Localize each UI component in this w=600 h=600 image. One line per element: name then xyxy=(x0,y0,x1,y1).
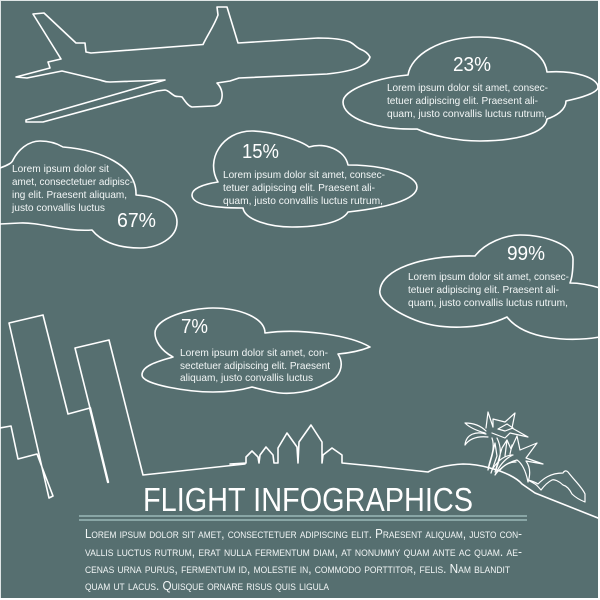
cloud: 15% xyxy=(192,131,417,227)
text block: footer paragraph: Lorem ipsum dolor sit amet, consectetuer adipiscing elit. Praesent aliquam, justo con- xyxy=(85,527,522,541)
text block: 7% cloud: sectetuer adipiscing elit. Praesent xyxy=(180,360,330,372)
text block: 67% cloud: amet, consectetuer adipisc- xyxy=(12,176,133,188)
text block: 7% cloud: Lorem ipsum dolor sit amet, con- xyxy=(180,347,328,359)
text block: 67% cloud: ing elit. Praesent aliquam, xyxy=(12,189,127,201)
text block: 99% cloud: tetuer adipiscing elit. Praesent ali- xyxy=(408,284,559,296)
text block: 67% cloud: Lorem ipsum dolor sit xyxy=(12,163,109,175)
percentage: 23%: 23% xyxy=(453,54,491,76)
text block: 23% cloud: Lorem ipsum dolor sit amet, consec- xyxy=(387,82,548,94)
icon: airplane outline xyxy=(16,7,370,122)
text block: footer paragraph: quam ut lacus. Quisque ornare risus quis ligula xyxy=(85,579,329,593)
text block: 23% cloud: quam, justo convallis luctus rutrum, xyxy=(387,108,547,120)
text block: footer paragraph: cenas urna purus, fermentum id, molestie in, commodo porttitor, felis. Nam blandit xyxy=(85,562,510,576)
text block: 67% cloud: justo convallis luctus xyxy=(11,202,105,214)
cloud: 23% xyxy=(343,37,598,141)
text block: 15% cloud: Lorem ipsum dolor sit amet, consec- xyxy=(223,169,385,181)
text block: 99% cloud: Lorem ipsum dolor sit amet, consec- xyxy=(408,271,569,283)
double rule under title xyxy=(79,516,527,520)
icon: palm trees xyxy=(465,412,543,482)
text block: 15% cloud: tetuer adipiscing elit. Praesent ali- xyxy=(223,182,375,194)
title: FLIGHT INFOGRAPHICS xyxy=(143,481,473,518)
text block: footer paragraph: vallis luctus rutrum, erat nulla fermentum diam, at nonummy quam ante ac quam. ae- xyxy=(85,545,522,559)
cloud: 7% xyxy=(142,308,370,393)
percentage: 67%: 67% xyxy=(117,210,156,232)
text block: 99% cloud: quam, justo convallis luctus rutrum, xyxy=(408,297,568,309)
text block: 7% cloud: aliquam, justo convallis luctus xyxy=(180,372,313,384)
percentage: 99%: 99% xyxy=(507,243,545,265)
text block: 15% cloud: quam, justo convallis luctus rutrum, xyxy=(223,195,383,207)
text block: 15% cloud xyxy=(223,169,385,207)
text block: 23% cloud xyxy=(387,82,548,120)
text block: footer paragraph xyxy=(85,527,522,593)
cloud: 99% xyxy=(380,235,600,339)
icon: city skyscrapers and horizon xyxy=(0,315,598,518)
text block: 23% cloud: tetuer adipiscing elit. Praesent ali- xyxy=(387,95,538,107)
text block: 7% cloud xyxy=(180,347,330,384)
icon: dolphin xyxy=(528,471,585,502)
percentage: 7%: 7% xyxy=(181,316,208,338)
text block: 99% cloud xyxy=(408,271,569,309)
icon: houses and hill line xyxy=(230,425,598,518)
percentage: 15%: 15% xyxy=(242,141,279,163)
text block: 67% cloud xyxy=(11,163,133,214)
cloud: 67% xyxy=(0,141,177,248)
